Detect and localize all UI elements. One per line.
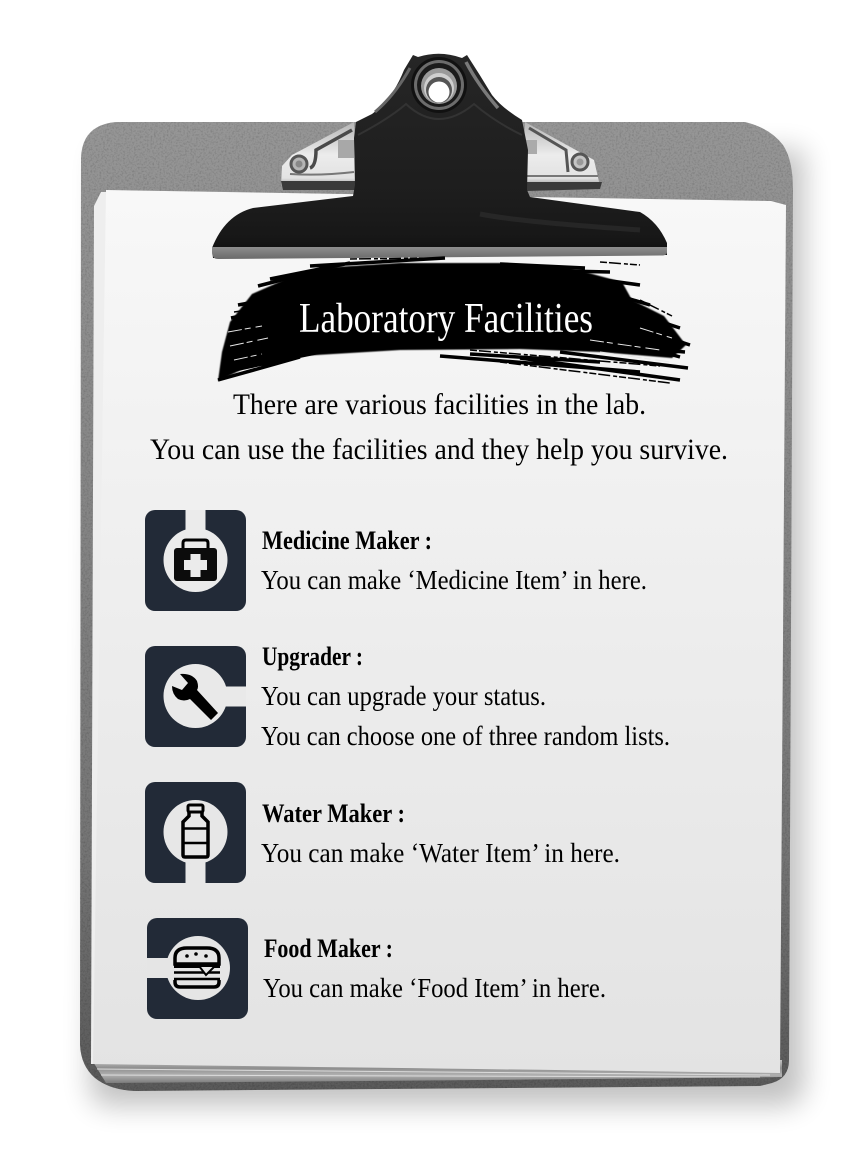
lip (212, 247, 667, 259)
icon: wrench (145, 646, 246, 747)
item: upgrader (145, 642, 670, 751)
text: upgrader: You can upgrade your status. (261, 681, 546, 711)
intro text (150, 388, 728, 466)
clip mechanism right (522, 122, 602, 191)
intro text: You can use the facilities and they help you survive. (150, 433, 728, 466)
item: food maker (147, 918, 606, 1019)
drop shadow (90, 150, 804, 1106)
text: water maker (261, 799, 620, 868)
text: water maker: You can make ‘Water Item’ in here. (261, 838, 620, 868)
text: food maker: Food Maker : (264, 934, 393, 963)
lower sheets (92, 1060, 782, 1083)
text: upgrader: You can choose one of three random lists. (261, 721, 670, 751)
intro text: There are various facilities in the lab. (233, 388, 646, 421)
text: medicine maker: Medicine Maker : (262, 526, 432, 555)
clip eyelet (411, 57, 467, 113)
text: upgrader (261, 642, 670, 751)
icon: burger (147, 918, 248, 1019)
clip mechanism left (281, 122, 358, 190)
item: water maker (145, 782, 620, 883)
clipboard board (80, 122, 793, 1091)
top sheet (93, 190, 786, 1073)
text: food maker: You can make ‘Food Item’ in here. (263, 973, 606, 1003)
clip body (212, 54, 667, 259)
text: food maker (263, 934, 606, 1003)
clip ridge (358, 104, 522, 135)
brush streaks (218, 258, 690, 380)
brush stroke title banner (218, 258, 690, 383)
title: Laboratory Facilities (299, 296, 593, 342)
paper stack (91, 190, 786, 1083)
text: medicine maker: You can make ‘Medicine Item’ in here. (261, 565, 647, 595)
brush gaps (228, 326, 672, 362)
icon: bottle (145, 782, 246, 883)
item: medicine maker (145, 510, 647, 611)
icon: medicine bag (145, 510, 246, 611)
text: water maker: Water Maker : (262, 799, 405, 828)
text: medicine maker (261, 526, 647, 595)
back sheets (91, 192, 108, 1064)
text: upgrader: Upgrader : (262, 642, 363, 671)
